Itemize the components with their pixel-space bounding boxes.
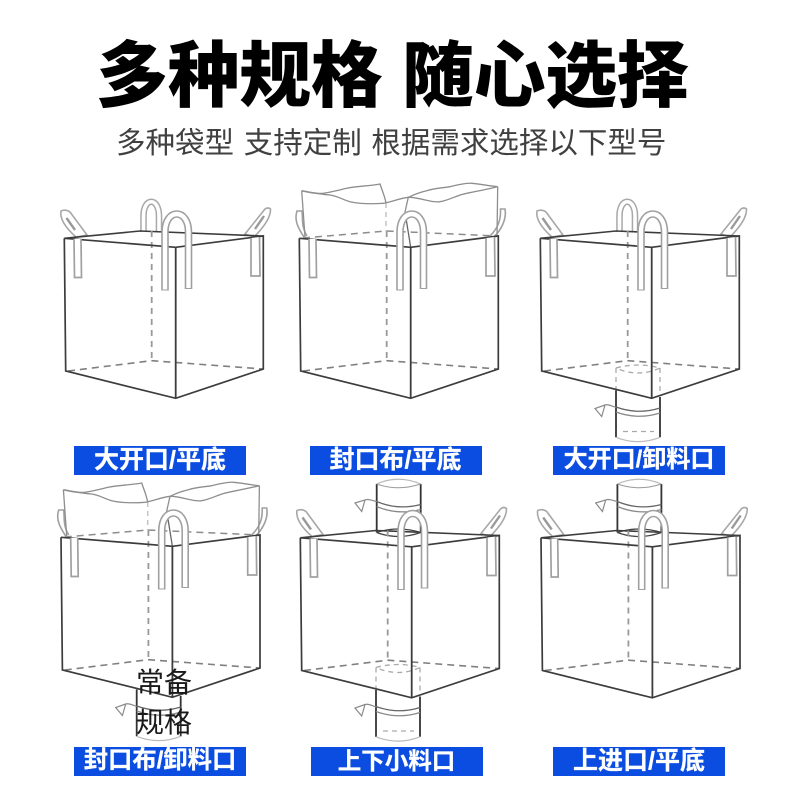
bag: 大开口/平底 bbox=[61, 202, 271, 398]
subtitle: 多种袋型 支持定制 根据需求选择以下型号 bbox=[116, 127, 666, 160]
label: 上进口/平底: 上进口/平底 bbox=[573, 747, 705, 775]
title: 多种规格 随心选择 bbox=[96, 37, 688, 117]
bag: 大开口/卸料口 bbox=[537, 202, 747, 442]
label: 封口布/平底: 封口布/平底 bbox=[330, 446, 461, 474]
label: 大开口/平底: 大开口/平底 bbox=[94, 446, 226, 474]
overlay text: 常备规格: 规格 bbox=[136, 707, 192, 738]
label: 上下小料口: 上下小料口 bbox=[338, 748, 455, 774]
label: 封口布/卸料口: 封口布/卸料口 bbox=[84, 747, 236, 774]
bag: 封口布/卸料口 bbox=[58, 482, 267, 741]
label: 大开口/卸料口: 大开口/卸料口 bbox=[564, 446, 714, 473]
overlay text: 常备规格: 常备 bbox=[136, 667, 192, 698]
bag: 上下小料口 bbox=[297, 479, 507, 741]
label: 上下小料口 bbox=[310, 747, 482, 776]
bag: 上进口/平底 bbox=[537, 479, 747, 698]
overlay text: 常备规格 bbox=[136, 667, 192, 738]
bag: 封口布/平底 bbox=[296, 183, 505, 398]
